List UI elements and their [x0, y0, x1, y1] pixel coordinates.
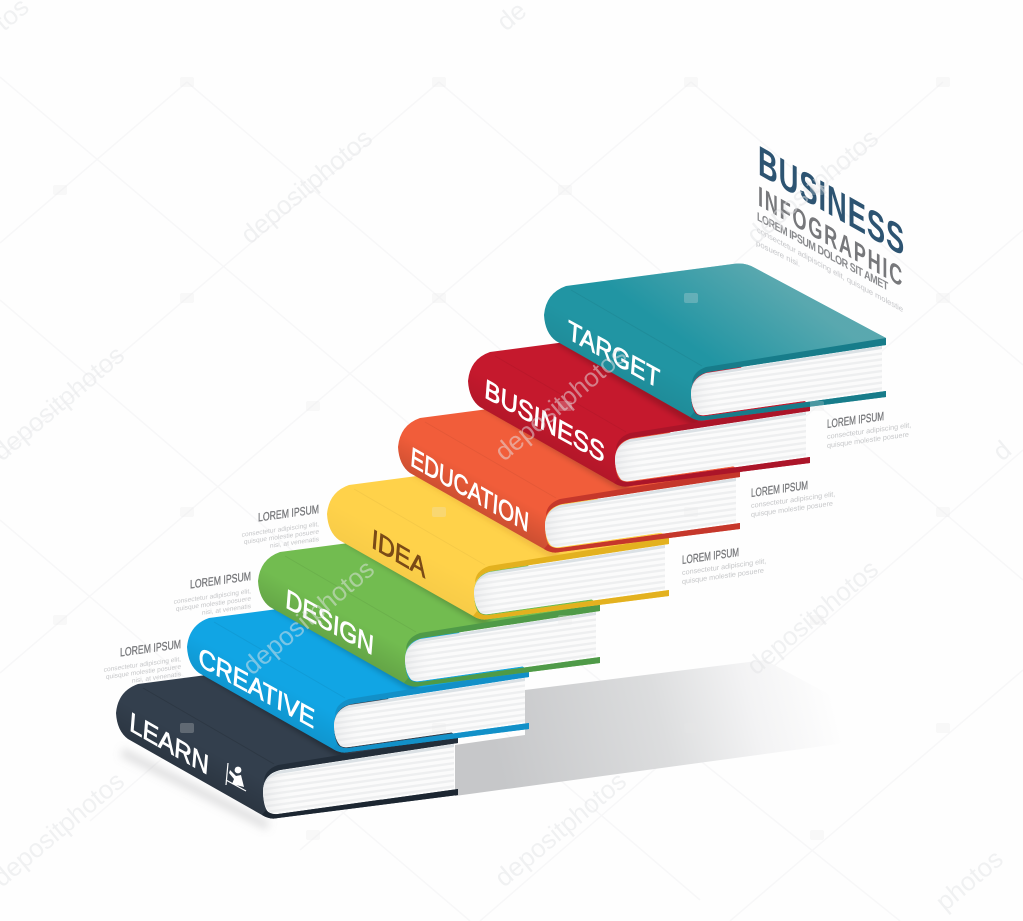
spine label: learn: LEARN [128, 707, 210, 782]
caption: left middle: LOREM IPSUM [190, 569, 251, 592]
spine label: target: TARGET [566, 315, 661, 395]
caption: right bottom: quisque molestie posuere [682, 566, 764, 586]
caption: right middle: quisque molestie posuere [751, 499, 833, 519]
caption: right top: consectetur adipiscing elit, [827, 420, 911, 441]
caption: right top: LOREM IPSUM [827, 409, 884, 431]
watermark text: depositphotos [237, 554, 380, 681]
caption: left top: nisi, at venenatis [270, 536, 320, 550]
title: business infographic [756, 135, 904, 314]
caption: left bottom: nisi, at venenatis [132, 671, 182, 685]
watermark text: depositphotos [741, 554, 884, 681]
caption: left bottom: quisque molestie posuere [106, 663, 181, 681]
title line: infographic: INFOGRAPHIC [758, 181, 902, 294]
book: education [398, 396, 740, 553]
watermark text: depositphotos [489, 766, 632, 893]
caption: left middle [174, 569, 252, 621]
title body line two: posuere nisi. [756, 237, 800, 269]
watermark text: depositphotos [235, 123, 378, 250]
spine label: creative: CREATIVE [197, 642, 316, 735]
title line: business: BUSINESS [758, 135, 904, 266]
caption: right middle: consectetur adipiscing elit, [751, 489, 835, 510]
book: design [258, 530, 600, 687]
caption: left middle: nisi, at venenatis [202, 603, 252, 617]
caption: right bottom [682, 541, 766, 586]
book: learn [116, 662, 458, 819]
watermark text: depositphotos [489, 340, 632, 467]
caption: left top: LOREM IPSUM [258, 502, 319, 525]
ground shadow [455, 660, 905, 796]
spine label: business: BUSINESS [483, 374, 606, 470]
caption: right middle: LOREM IPSUM [751, 478, 808, 500]
spine label: idea: IDEA [370, 524, 428, 585]
caption: left bottom: LOREM IPSUM [120, 637, 181, 660]
book: target [544, 264, 886, 421]
title body line one: consectetur adipiscing elit, quisque molestie [757, 225, 903, 314]
watermark text: photos [930, 843, 1009, 917]
watermark camera marks [53, 77, 950, 840]
caption: right bottom: consectetur adipiscing elit, [682, 556, 766, 577]
spine label: education: EDUCATION [409, 442, 530, 539]
caption: left bottom: consectetur adipiscing elit, [104, 656, 181, 674]
caption: left top: consectetur adipiscing elit, [242, 521, 319, 539]
caption: left middle: quisque molestie posuere [176, 595, 251, 613]
caption: left bottom [104, 637, 182, 689]
book: idea [327, 462, 669, 620]
caption: left top [242, 502, 320, 554]
caption: right bottom: LOREM IPSUM [682, 545, 739, 567]
caption: right top [827, 405, 911, 450]
watermark text: d [987, 434, 1017, 467]
book: business [468, 330, 810, 487]
soft shadow under bottom book [122, 752, 268, 826]
caption: left top: quisque molestie posuere [244, 528, 319, 546]
watermark text: depositphotos [741, 123, 884, 250]
caption: right top: quisque molestie posuere [827, 430, 909, 450]
title subhead: LOREM IPSUM DOLOR SIT AMET [757, 210, 888, 294]
icon: person at desk [226, 763, 246, 791]
caption: left middle: consectetur adipiscing elit, [174, 588, 251, 606]
book: creative [187, 596, 529, 753]
caption: right middle [751, 474, 835, 519]
spine label: design: DESIGN [284, 584, 375, 662]
